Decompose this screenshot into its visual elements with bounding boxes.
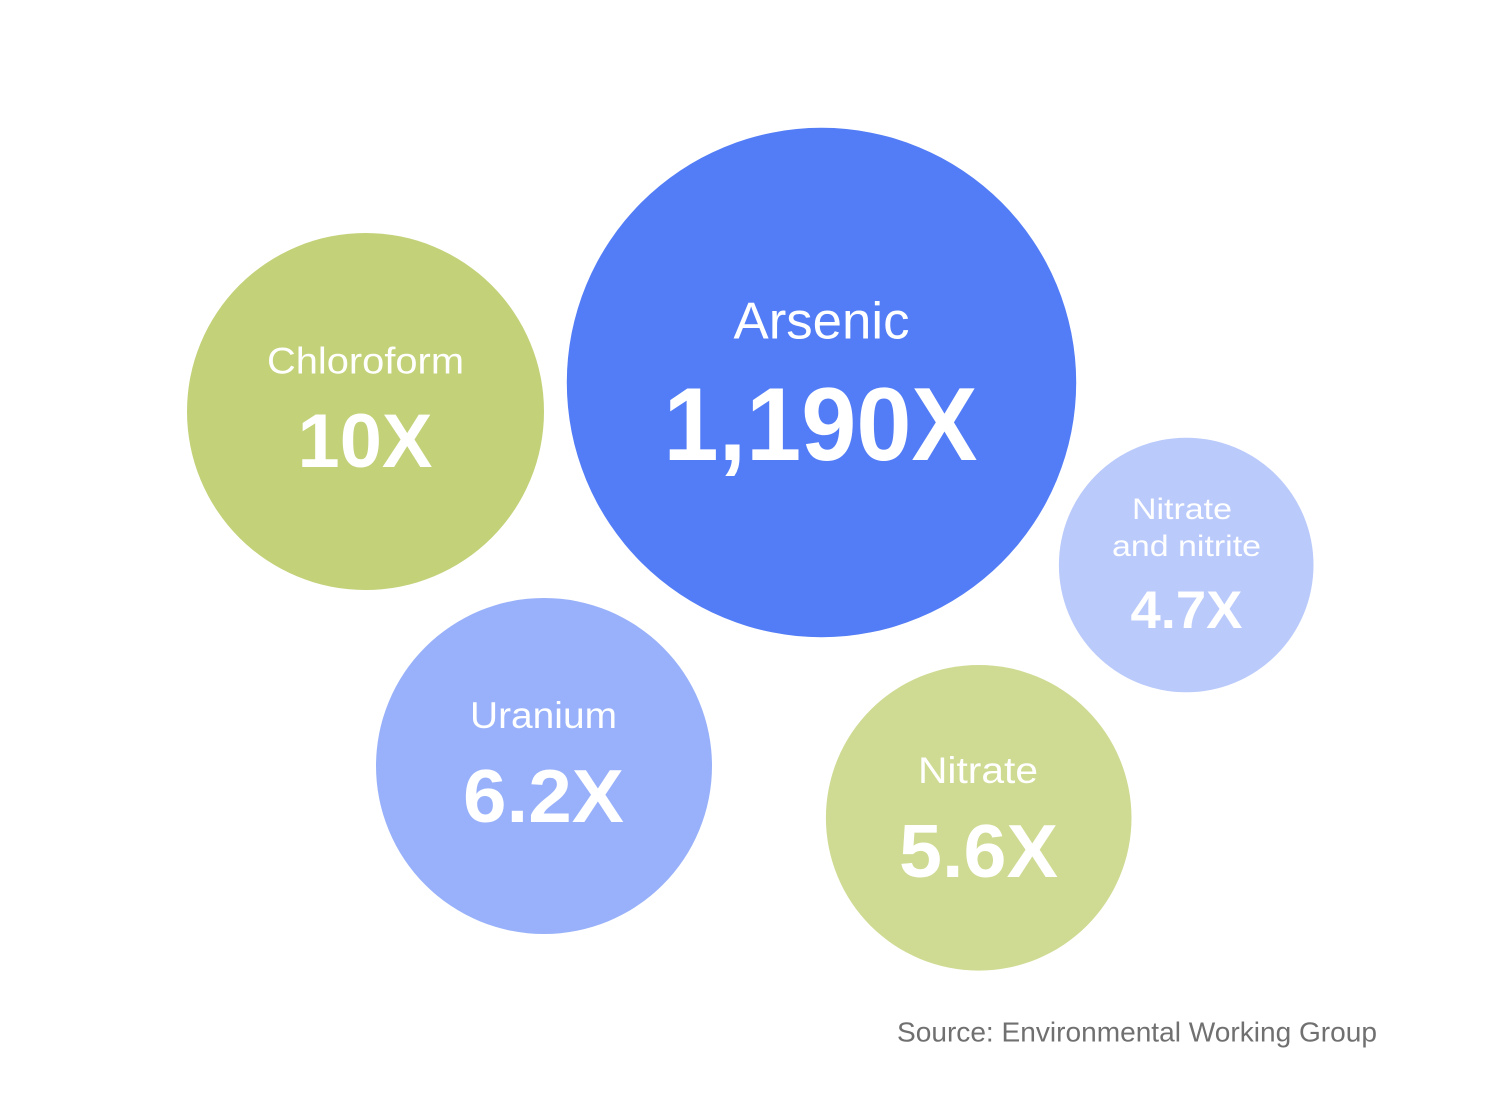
- bubble: Arsenic: [567, 128, 1076, 637]
- bubble: Chloroform: Chloroform: [267, 340, 464, 382]
- bubble: Nitrate: 5.6X: [899, 809, 1058, 893]
- bubble: Chloroform: 10X: [298, 399, 433, 484]
- bubble: Nitrate and nitrite: Nitrate: [1132, 493, 1232, 526]
- bubble: Nitrate and nitrite: [1059, 438, 1313, 692]
- bubble: Arsenic: Arsenic: [734, 292, 910, 350]
- bubble: Arsenic: 1,190X: [664, 367, 978, 483]
- bubble: Uranium: Uranium: [470, 694, 617, 736]
- bubble: Nitrate: [826, 665, 1132, 971]
- bubble: Uranium: 6.2X: [463, 754, 624, 838]
- bubble: Nitrate: Nitrate: [918, 749, 1038, 791]
- bubble: Nitrate and nitrite: and nitrite: [1112, 530, 1261, 563]
- source note: Source: Environmental Working Group: [897, 1016, 1377, 1048]
- bubble: Chloroform: [187, 233, 544, 590]
- bubble: Uranium: [376, 598, 712, 934]
- bubble: Nitrate and nitrite: 4.7X: [1130, 581, 1242, 640]
